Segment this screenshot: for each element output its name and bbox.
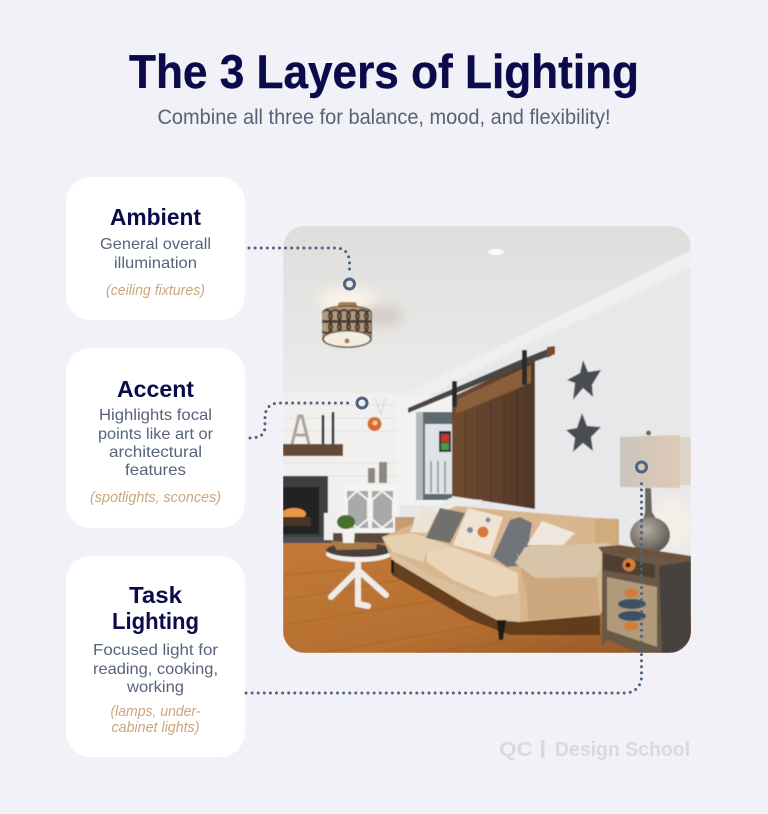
floor: [283, 543, 700, 653]
text: task examples: cabinet lights): [112, 720, 200, 736]
text: ambient description: illumination: [114, 255, 197, 272]
photo: living room: [282, 226, 700, 653]
text: accent description: features: [125, 462, 186, 479]
text: task description: Focused light for: [93, 642, 219, 659]
lantern: [324, 513, 335, 540]
connector: ambient to ceiling lamp: [249, 248, 354, 289]
heading: task lighting: Lighting: [112, 608, 199, 634]
coffee table: [326, 515, 392, 606]
text: ambient examples: (ceiling fixtures): [106, 283, 205, 299]
text: ambient description: [100, 236, 211, 272]
panel: ambient: [66, 177, 245, 320]
barn door: [452, 358, 535, 509]
text: ambient description: General overall: [100, 236, 211, 253]
window doorway: [416, 412, 452, 500]
wall stars: [566, 360, 601, 452]
sofa: [382, 498, 619, 640]
heading: task lighting: [112, 582, 199, 634]
logo: QC Design School: Design School: [555, 739, 690, 761]
mantel decor: [292, 412, 333, 444]
sofa arm and throw: [517, 553, 600, 620]
text: task description: [93, 642, 219, 696]
text: accent examples: (spotlights, sconces): [90, 490, 221, 506]
panel: accent: [66, 348, 245, 528]
text: accent description: Highlights focal: [99, 407, 212, 424]
marker: accent: [357, 398, 367, 408]
table lamp: [620, 430, 694, 553]
crown moulding: [400, 250, 691, 408]
ceiling: [283, 226, 690, 304]
nightstand: [598, 545, 691, 653]
logo: QC Design School: [499, 739, 690, 761]
marker: task: [636, 462, 646, 472]
panel: task lighting: [66, 556, 245, 757]
wall sconce: [368, 398, 385, 431]
title: The 3 Layers of Lighting: [129, 46, 639, 99]
fireplace: [282, 476, 333, 543]
text: task description: reading, cooking,: [93, 661, 218, 678]
logo: QC Design School: QC: [499, 739, 533, 761]
white cabinet: [346, 490, 394, 528]
dark base strip: [333, 533, 398, 543]
text: task examples: [110, 704, 201, 736]
back wall: [284, 394, 399, 532]
connector: task to table lamp: [246, 462, 646, 693]
text: accent description: architectural: [109, 444, 202, 461]
mantel: [283, 444, 343, 456]
recessed light: [488, 249, 504, 255]
text: accent description: [98, 407, 214, 479]
vases on cabinet: [368, 462, 387, 483]
heading: task lighting: Task: [129, 582, 182, 608]
connector: accent to sconce: [250, 398, 367, 438]
side wall: [397, 396, 452, 505]
heading: ambient: Ambient: [110, 204, 201, 230]
text: accent description: points like art or: [98, 426, 214, 443]
barn door rail: [408, 346, 555, 413]
sofa shadow: [392, 560, 600, 635]
marker: ambient: [344, 279, 354, 289]
text: task examples: (lamps, under-: [110, 704, 201, 720]
subtitle: Combine all three for balance, mood, and flexibility!: [158, 105, 610, 129]
text: task description: working: [126, 679, 184, 696]
heading: accent: Accent: [117, 376, 194, 402]
cushions: [410, 506, 437, 533]
ceiling lamp: [318, 288, 402, 348]
